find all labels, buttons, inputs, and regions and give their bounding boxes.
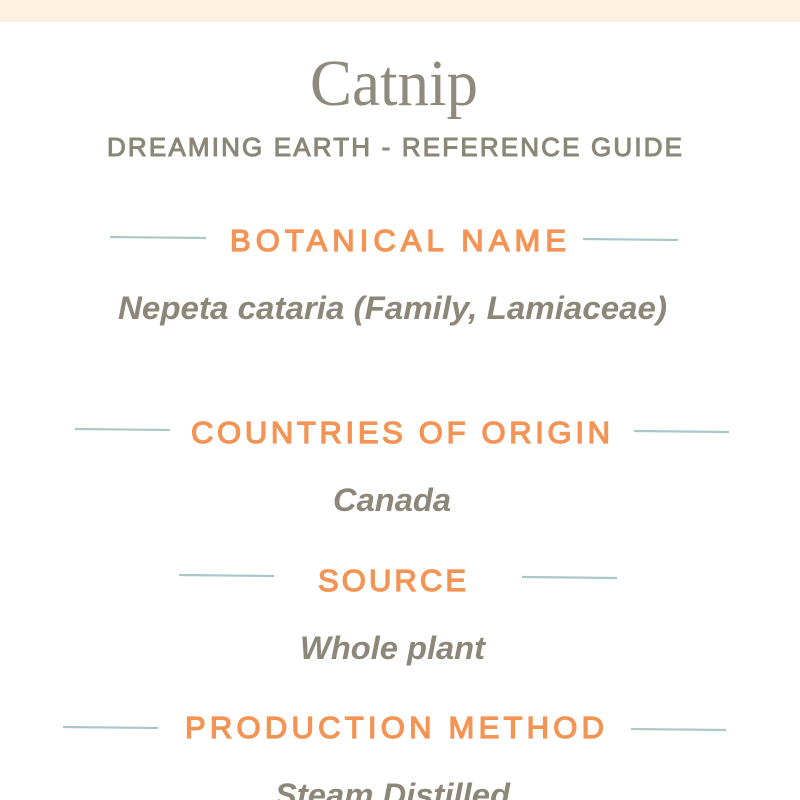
section: botanical name: Nepeta cataria (Family, Lamiaceae)	[118, 290, 667, 326]
section: production method: PRODUCTION METHOD	[185, 710, 604, 745]
title: Catnip	[310, 47, 478, 120]
section: production method	[63, 710, 726, 800]
section: source	[179, 563, 617, 666]
section: countries of origin: Canada	[333, 482, 451, 518]
section: botanical name	[110, 223, 678, 326]
section: botanical name: BOTANICAL NAME	[230, 223, 566, 258]
subtitle: DREAMING EARTH - REFERENCE GUIDE	[107, 132, 682, 162]
section: source: Whole plant	[300, 630, 486, 666]
section: source: SOURCE	[318, 563, 466, 598]
top cream band	[0, 0, 800, 22]
section: countries of origin	[75, 415, 729, 518]
section: countries of origin: COUNTRIES OF ORIGIN	[191, 415, 610, 450]
